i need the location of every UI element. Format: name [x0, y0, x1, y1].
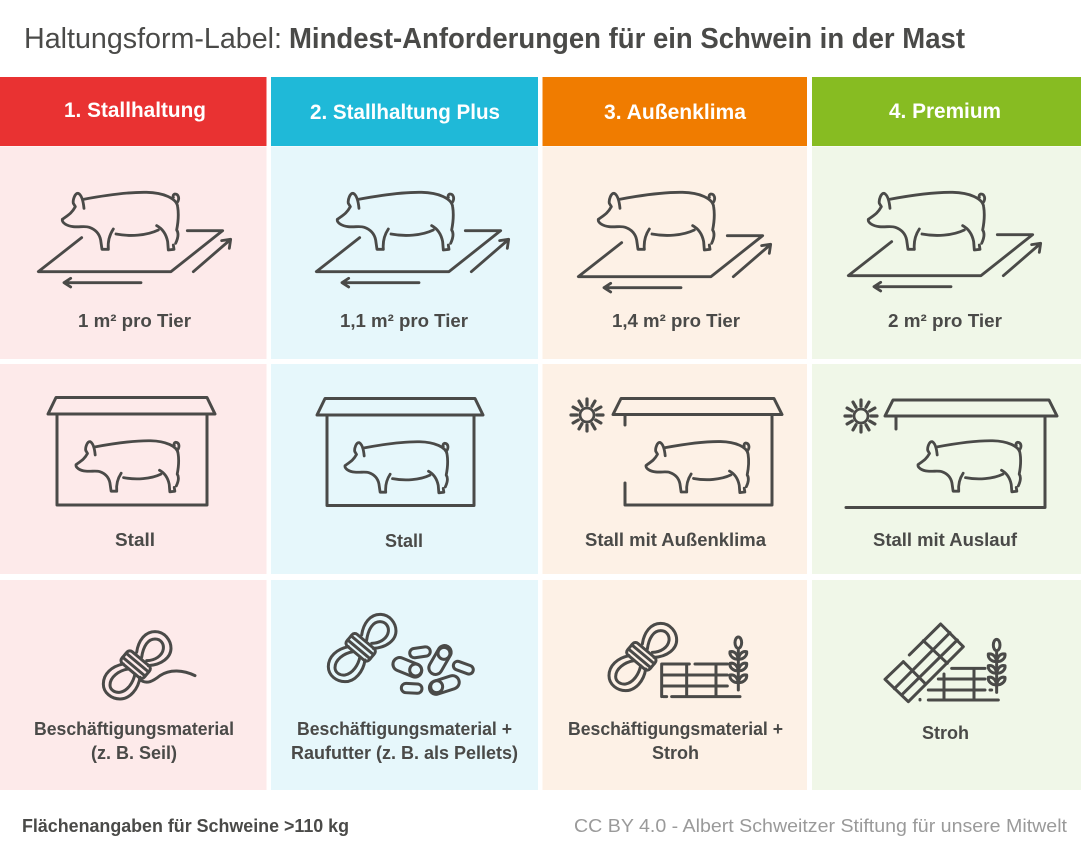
column header: 3. Außenklima [542, 77, 807, 146]
panel: space column 4 [812, 146, 1081, 359]
title: Haltungsform-Label: [24, 23, 282, 55]
panel: housing column 1 [0, 364, 266, 574]
icon: stall with outdoor run, sun and pig [845, 400, 1057, 508]
panel: enrichment column 3 [542, 580, 807, 790]
column header: 1. Stallhaltung [0, 77, 266, 146]
label: Beschäftigungsmaterial (z. B. Seil): Beschäftigungsmaterial [34, 719, 234, 739]
icon: rope, straw bale and wheat [609, 623, 747, 697]
column header: 4. Premium [812, 77, 1081, 146]
icon: closed stall with pig [48, 398, 215, 505]
icon: pig on floor 1,1 m² [316, 192, 509, 287]
column header: 3. Außenklima: 3. Außenklima [604, 101, 746, 124]
column header: 4. Premium: 4. Premium [889, 100, 1001, 123]
icon: open-climate stall with sun and pig [571, 398, 782, 505]
label: Beschäftigungsmaterial + Raufutter (z. B. als Pellets): Raufutter (z. B. als Pellets) [291, 743, 518, 763]
title [24, 23, 965, 55]
title: Mindest-Anforderungen für ein Schwein in der Mast [289, 23, 965, 55]
column header: 2. Stallhaltung Plus [271, 77, 538, 146]
label: 1,1 m² pro Tier: 1,1 m² pro Tier [340, 311, 468, 331]
icon: rope [103, 632, 195, 699]
label: Beschäftigungsmaterial (z. B. Seil) [34, 719, 234, 763]
icon: closed stall with pig [317, 398, 483, 506]
column header: 2. Stallhaltung Plus: 2. Stallhaltung Plus [310, 101, 500, 124]
panel: housing column 2 [271, 364, 538, 574]
label: Beschäftigungsmaterial + Raufutter (z. B. als Pellets) [291, 719, 518, 763]
label: Stall mit Außenklima: Stall mit Außenklima [585, 530, 767, 550]
label: 1 m² pro Tier: 1 m² pro Tier [78, 311, 191, 331]
label: Stall: Stall [385, 531, 423, 551]
label: 1,4 m² pro Tier: 1,4 m² pro Tier [612, 311, 740, 331]
panel: enrichment column 2 [271, 580, 538, 790]
label: Beschäftigungsmaterial + Raufutter (z. B. als Pellets): Beschäftigungsmaterial + [297, 719, 512, 739]
panel: housing column 4 [812, 364, 1081, 574]
label: Beschäftigungsmaterial + Stroh [568, 719, 783, 763]
panel: enrichment column 1 [0, 580, 266, 790]
label: Stall: Stall [115, 530, 155, 550]
panel: space column 1 [0, 146, 266, 359]
label: Stroh: Stroh [922, 723, 969, 743]
label: 2 m² pro Tier: 2 m² pro Tier [888, 311, 1002, 331]
icon: pig on floor 1 m² [38, 192, 231, 287]
panel: housing column 3 [542, 364, 807, 574]
footnote: area figures: Flächenangaben für Schweine >110 kg [22, 816, 349, 836]
label: Beschäftigungsmaterial + Stroh: Beschäftigungsmaterial + [568, 719, 783, 739]
panel: space column 3 [542, 146, 807, 359]
icon: rope and pellets [328, 614, 475, 696]
icon: straw bales and wheat [885, 624, 1005, 702]
credit line: CC BY 4.0 - Albert Schweitzer Stiftung für unsere Mitwelt [574, 816, 1067, 836]
label: Beschäftigungsmaterial (z. B. Seil): (z. B. Seil) [91, 743, 177, 763]
label: Beschäftigungsmaterial + Stroh: Stroh [652, 743, 699, 763]
column header: 1. Stallhaltung: 1. Stallhaltung [64, 99, 206, 122]
panel: enrichment column 4 [812, 580, 1081, 790]
label: Stall mit Auslauf: Stall mit Auslauf [873, 530, 1018, 550]
icon: pig on floor 1,4 m² [578, 192, 771, 292]
panel: space column 2 [271, 146, 538, 359]
icon: pig on floor 2 m² [848, 192, 1041, 291]
